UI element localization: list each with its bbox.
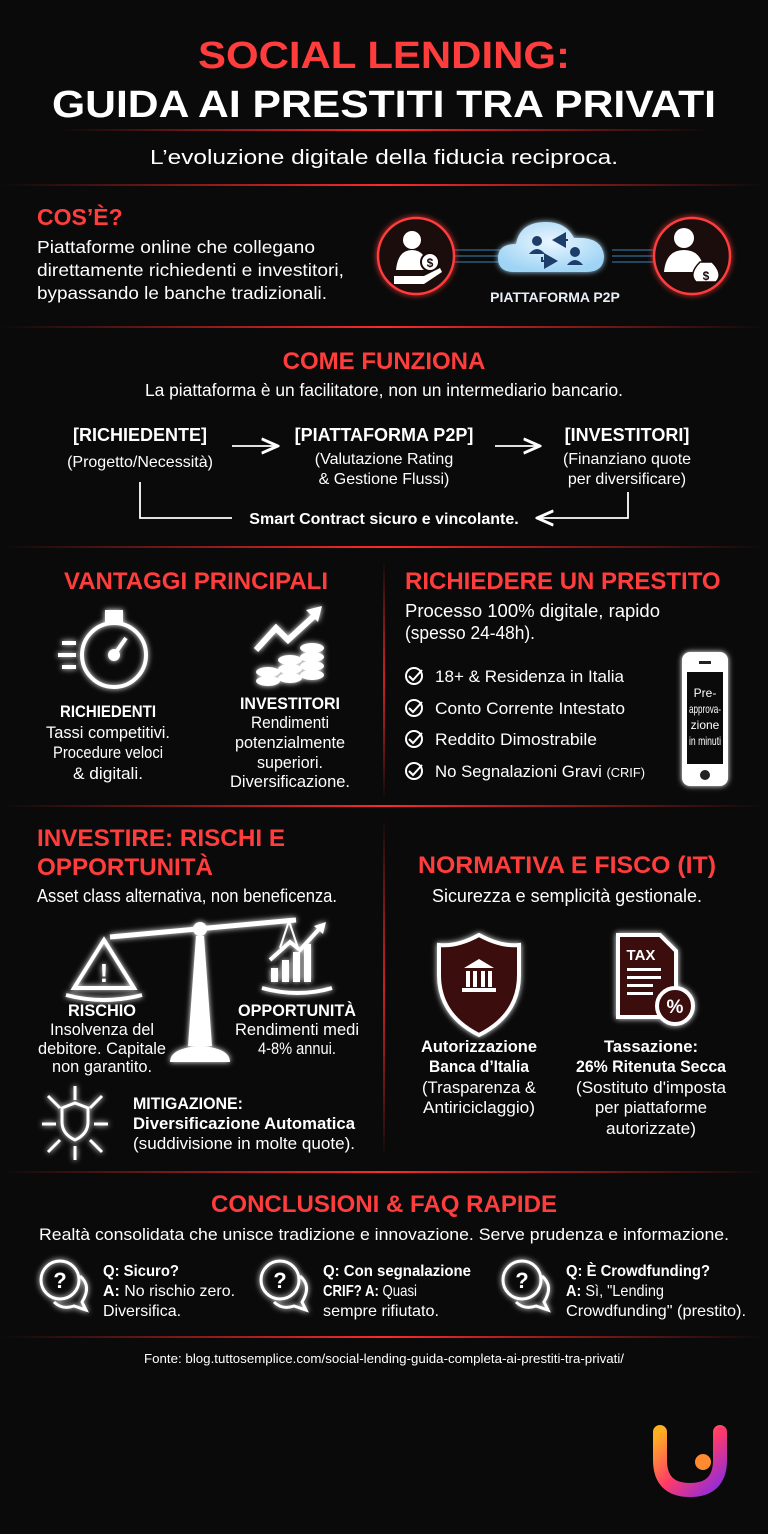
panel: investire: OPPORTUNITÀ [37, 853, 213, 881]
text: autorizzazione: Banca d’Italia [429, 1057, 529, 1076]
text: mitigazione: Diversificazione Automatica [133, 1114, 356, 1133]
icon: P2P platform graphic: $ [703, 269, 710, 283]
text: investitori: superiori. [257, 753, 323, 772]
text: rischio: Insolvenza del [50, 1020, 154, 1039]
checklist [406, 667, 645, 781]
icon: balance scale: ! [100, 958, 108, 988]
text: investitori: Diversificazione. [230, 772, 350, 791]
text: richiedenti: & digitali. [73, 764, 143, 783]
text: mitigazione: MITIGAZIONE: [133, 1094, 243, 1113]
text: richiedenti: RICHIEDENTI [60, 702, 156, 721]
faq 3: A: Sì, "Lending [566, 1283, 664, 1300]
icon: phone [682, 652, 728, 786]
panel: cos'è: Piattaforme online che collegano [37, 237, 315, 257]
panel: normativa e fisco [418, 852, 727, 1138]
panel: investire: Asset class alternativa, non beneficenza. [37, 886, 337, 906]
text: autorizzazione: (Trasparenza & [422, 1078, 537, 1097]
text: rischio [38, 1001, 166, 1076]
faq 3: Q: È Crowdfunding? [566, 1261, 710, 1280]
text: tassazione: (Sostituto d'imposta [576, 1078, 727, 1097]
text: richiedenti: Tassi competitivi. [46, 723, 170, 742]
panel: richiedere un prestito: RICHIEDERE UN PRESTITO [405, 568, 721, 595]
panel: normativa e fisco: NORMATIVA E FISCO (IT) [418, 852, 716, 879]
icon: shield arrows [42, 1086, 108, 1160]
text: opportunità: OPPORTUNITÀ [238, 1001, 356, 1020]
title: SOCIAL LENDING: [198, 35, 570, 77]
icon: P2P platform graphic: $ [427, 256, 434, 270]
flow step: piattaforma: [PIATTAFORMA P2P] [295, 425, 473, 445]
text: tassazione [576, 1037, 727, 1138]
icon: tax document: TAX [627, 947, 655, 964]
text: autorizzazione: Autorizzazione [421, 1037, 537, 1056]
icon: logo [660, 1432, 720, 1490]
panel: conclusioni: Realtà consolidata che unisce tradizione e innovazione. Serve prudenza e informazione. [39, 1225, 729, 1244]
text: mitigazione: (suddivisione in molte quote). [133, 1134, 355, 1153]
faq 3: Crowdfunding" (prestito). [566, 1303, 746, 1320]
checklist: Conto Corrente Intestato [435, 699, 625, 718]
panel: richiedere un prestito: (spesso 24-48h). [405, 623, 535, 643]
panel: cos'è: COS’È? [37, 203, 123, 230]
panel: investire: INVESTIRE: RISCHI E [37, 825, 285, 852]
icon: phone: in minuti [689, 734, 721, 748]
text: tassazione: per piattaforme [595, 1098, 707, 1117]
icon: coins growth [256, 606, 324, 686]
faq 3: ? [515, 1268, 529, 1293]
icon: stopwatch [58, 612, 146, 687]
faq 1 [41, 1261, 235, 1320]
flow step: piattaforma: (Valutazione Rating [315, 451, 453, 468]
subtitle: L’evoluzione digitale della fiducia reciproca. [150, 147, 618, 169]
faq 2: Q: Con segnalazione [323, 1263, 471, 1280]
panel: come funziona: COME FUNZIONA [283, 348, 485, 375]
panel: richiedere un prestito: Processo 100% digitale, rapido [405, 601, 660, 621]
text: investitori: potenzialmente [235, 733, 345, 752]
faq 1: Diversifica. [103, 1303, 181, 1320]
flow step: investitori: (Finanziano quote [563, 451, 691, 468]
faq 3 [503, 1261, 746, 1320]
text: autorizzazione: Antiriciclaggio) [423, 1098, 535, 1117]
text: tassazione: 26% Ritenuta Secca [576, 1057, 726, 1076]
icon: shield bank [439, 935, 519, 1035]
flow step: richiedente: [RICHIEDENTE] [73, 425, 207, 445]
title [52, 35, 716, 126]
faq 1: Q: Sicuro? [103, 1263, 179, 1280]
panel: normativa e fisco: Sicurezza e semplicità gestionale. [432, 886, 702, 906]
panel: come funziona [67, 348, 691, 528]
text: investitori: INVESTITORI [240, 694, 340, 713]
faq 2 [261, 1261, 471, 1320]
text: tassazione: Tassazione: [604, 1037, 698, 1056]
panel: cos'è: bypassando le banche tradizionali. [37, 283, 327, 303]
flow step: richiedente: (Progetto/Necessità) [67, 454, 213, 471]
text: opportunità: Rendimenti medi [235, 1020, 359, 1039]
faq 2: sempre rifiutato. [323, 1303, 439, 1320]
arrow [495, 445, 538, 447]
text: tassazione: autorizzate) [606, 1119, 696, 1138]
panel: cos'è [37, 203, 344, 303]
panel: conclusioni [39, 1191, 746, 1320]
flow step: piattaforma: & Gestione Flussi) [319, 471, 449, 488]
text: rischio: RISCHIO [68, 1001, 136, 1020]
panel: investire [37, 825, 359, 1160]
faq 1: A: No rischio zero. [103, 1283, 235, 1300]
faq 2: CRIF? A: Quasi [323, 1283, 417, 1300]
faq 2: ? [273, 1268, 287, 1293]
flow step: investitori: per diversificare) [568, 471, 686, 488]
text: investitori [230, 694, 350, 791]
checklist: Reddito Dimostrabile [435, 730, 597, 749]
text: richiedenti [46, 702, 170, 783]
icon: phone: Pre- [694, 686, 716, 700]
icon: balance scale [66, 920, 332, 1062]
text: mitigazione [133, 1094, 356, 1153]
title: GUIDA AI PRESTITI TRA PRIVATI [52, 84, 716, 126]
icon: P2P platform graphic: PIATTAFORMA P2P [490, 289, 620, 305]
text: opportunità: 4-8% annui. [258, 1039, 336, 1058]
icon: P2P platform graphic [378, 218, 730, 305]
text: opportunità [235, 1001, 359, 1058]
icon: phone: approva- [689, 702, 721, 716]
arrow: loop [140, 482, 628, 528]
panel: come funziona: La piattaforma è un facilitatore, non un intermediario bancario. [145, 380, 623, 400]
arrow: loop: Smart Contract sicuro e vincolante. [249, 511, 519, 528]
icon: phone: zione [691, 718, 720, 732]
source: Fonte: blog.tuttosemplice.com/social-lending-guida-completa-ai-prestiti-tra-privati/ [144, 1351, 624, 1366]
faq 1: ? [53, 1268, 67, 1293]
text: investitori: Rendimenti [251, 713, 329, 732]
panel: conclusioni: CONCLUSIONI & FAQ RAPIDE [211, 1191, 557, 1218]
panel: cos'è: direttamente richiedenti e investitori, [37, 260, 344, 280]
flow step: richiedente [67, 425, 213, 471]
checklist: No Segnalazioni Gravi (CRIF) [435, 762, 645, 781]
flow step: investitori [563, 425, 691, 488]
text: autorizzazione [421, 1037, 537, 1117]
text: richiedenti: Procedure veloci [53, 743, 163, 762]
flow step: investitori: [INVESTITORI] [565, 425, 689, 445]
panel: vantaggi [46, 568, 350, 791]
flow step: piattaforma [295, 425, 473, 488]
panel: vantaggi: VANTAGGI PRINCIPALI [64, 568, 328, 595]
panel: richiedere un prestito [405, 568, 728, 786]
icon: tax document [618, 935, 693, 1024]
icon: tax document: % [667, 997, 684, 1018]
arrow [232, 445, 276, 447]
text: rischio: non garantito. [52, 1057, 152, 1076]
text: rischio: debitore. Capitale [38, 1039, 166, 1058]
checklist: 18+ & Residenza in Italia [435, 667, 625, 686]
